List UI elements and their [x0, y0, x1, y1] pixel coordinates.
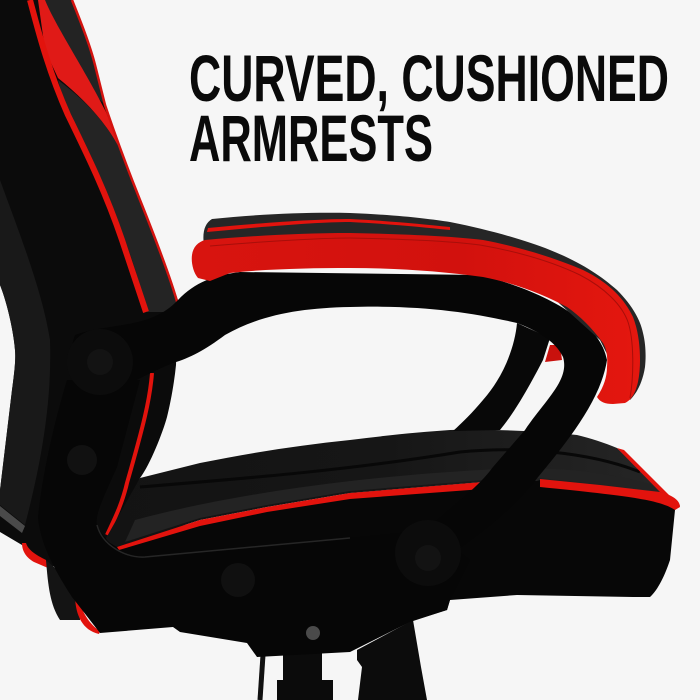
- armrest red seam: [207, 219, 450, 232]
- seat front red piping left: [117, 482, 483, 550]
- seat cushion: [46, 430, 680, 640]
- gas lift and cable: [260, 620, 427, 700]
- title: [189, 41, 669, 175]
- seat base block: [46, 560, 80, 620]
- inner red piping: [30, 0, 146, 312]
- seat top: [105, 430, 667, 547]
- seat side red stripe: [617, 448, 670, 496]
- seat dark crease: [140, 450, 640, 487]
- armrest stitch line: [210, 238, 633, 398]
- lower mesh panel: [58, 80, 178, 312]
- base screw: [306, 626, 320, 640]
- pivot bolt lower: [395, 520, 461, 586]
- pivot bolt upper: [67, 329, 133, 395]
- seat side: [100, 480, 680, 640]
- armrest secondary support: [453, 323, 562, 431]
- upper mesh panel: [42, 0, 105, 105]
- vertical and lower frame: [38, 380, 470, 657]
- frame bolt middle: [67, 445, 97, 475]
- lower red piping: [107, 373, 152, 535]
- seat mesh band: [125, 468, 660, 542]
- armrest top mesh: [203, 213, 646, 400]
- red panel: [38, 0, 125, 160]
- backrest side mesh: [0, 180, 50, 525]
- outer red piping: [72, 0, 178, 305]
- lower red trim: [75, 598, 100, 634]
- armrest cushion: [192, 213, 646, 404]
- plastic arm frame: [38, 272, 607, 657]
- title: ARMRESTS: [189, 101, 433, 175]
- frame bolt lower: [221, 563, 255, 597]
- armrest red body: [192, 233, 640, 404]
- arm and front strut: [72, 272, 607, 548]
- backrest: [0, 0, 178, 568]
- left red trim: [22, 543, 48, 568]
- seat front red piping right: [540, 479, 680, 510]
- frame highlight: [97, 525, 350, 557]
